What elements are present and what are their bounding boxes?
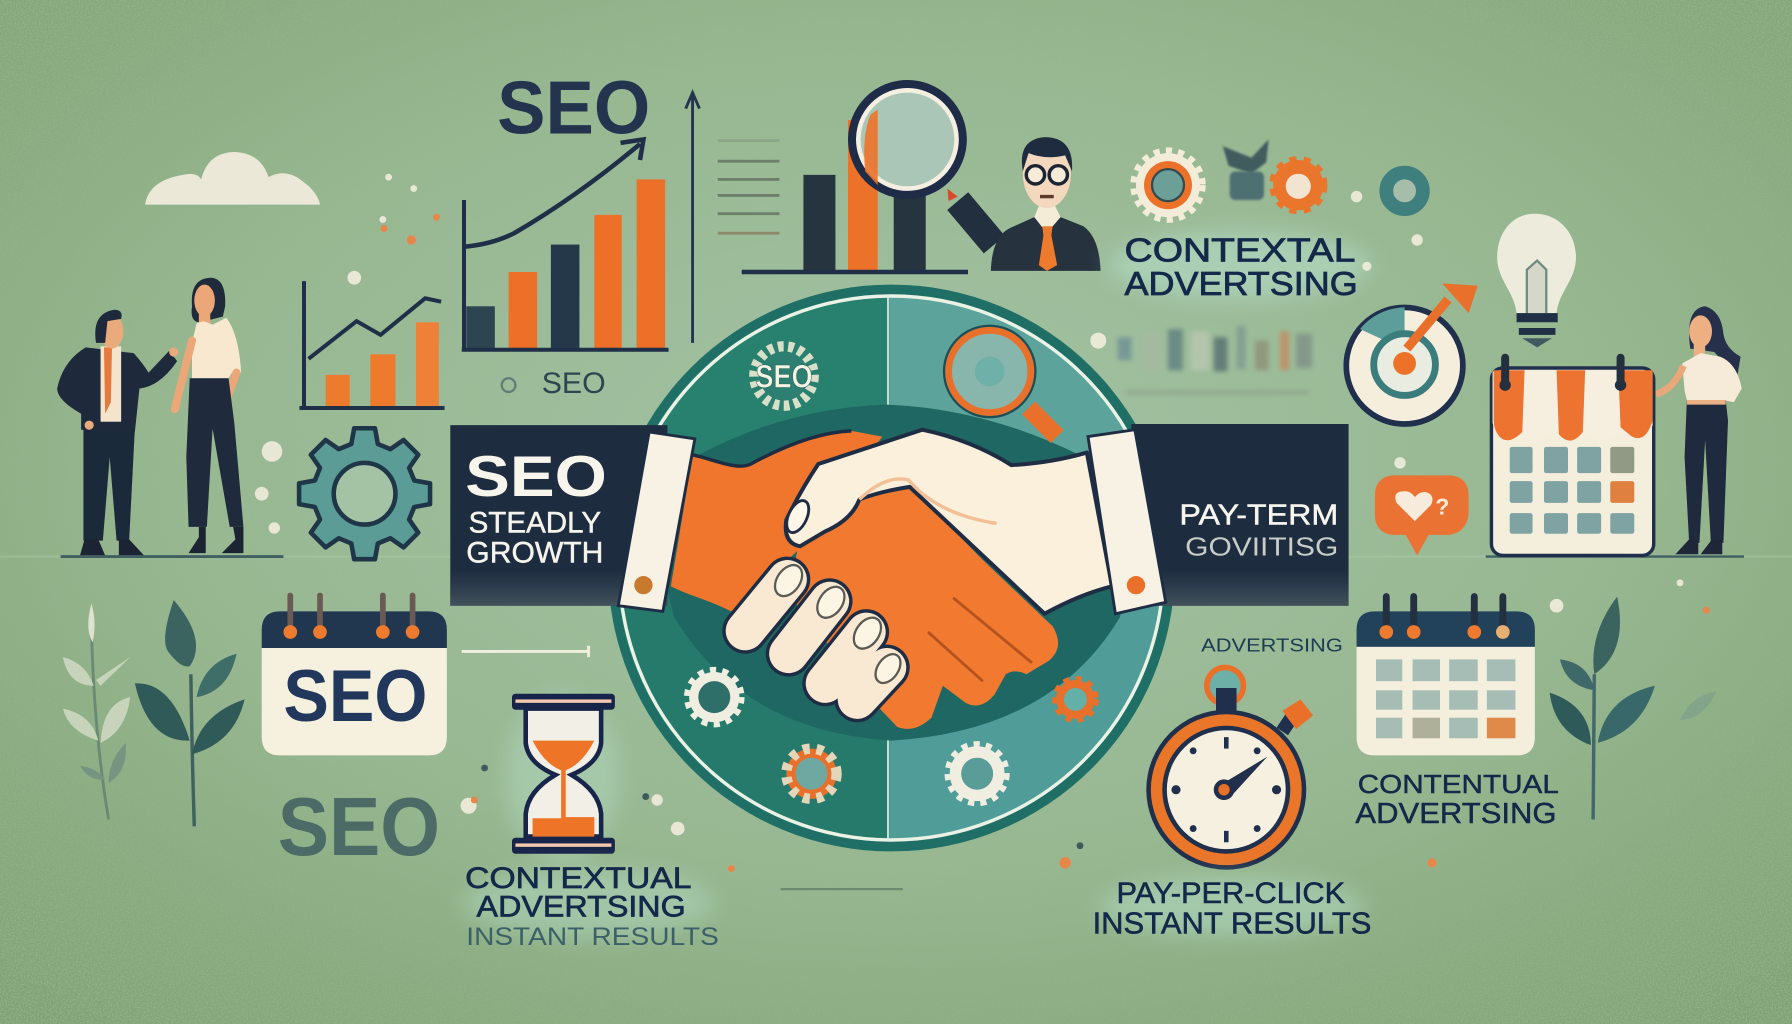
label: contextual advertising instant results: INSTANT RESULTS <box>466 923 719 951</box>
glow behind pay-per-click label <box>1101 877 1363 936</box>
icon: stopwatch <box>1146 667 1313 870</box>
label: small SEO <box>502 367 606 400</box>
bar: right pay-term band: PAY-TERM <box>1179 500 1338 532</box>
glow behind contextual label <box>1109 231 1371 299</box>
person: man with glasses <box>991 137 1101 271</box>
icon: dark plant left <box>135 600 245 826</box>
decorative specks <box>255 174 1710 889</box>
blurred bar strip <box>1118 326 1312 394</box>
label: contextal advertising: CONTEXTAL <box>1125 233 1355 270</box>
icon: lightbulb <box>1497 214 1576 347</box>
label: pay-per-click instant results <box>1093 877 1371 941</box>
icon: gears in circle lower left <box>689 672 739 722</box>
label: pay-per-click instant results: INSTANT RESULTS <box>1093 906 1371 941</box>
badge: SEO gear in circle: SEO <box>755 358 813 394</box>
icon: right cuff <box>1088 430 1166 614</box>
label: contextual advertising instant results <box>465 862 719 951</box>
bar: left SEO band: SEO <box>465 445 607 509</box>
icon: like speech bubble: ? <box>1435 493 1449 519</box>
icon: left gear <box>299 428 430 559</box>
icon: target with arrow <box>1346 283 1478 424</box>
label: contextual advertising instant results: ADVERTSING <box>477 891 686 924</box>
label: contentual advertising: CONTENTUAL <box>1358 769 1559 799</box>
chart: rising bars with arrow <box>462 139 669 350</box>
icon: left cuff <box>618 432 695 611</box>
icon: calendar with SEO <box>262 595 447 755</box>
icon: like speech bubble <box>1375 475 1469 555</box>
icon: magnifier in circle <box>944 326 1057 437</box>
chart: small line and bars <box>299 281 445 408</box>
icon: calendar with SEO: SEO <box>283 656 427 737</box>
icon: vertical arrow <box>686 93 699 343</box>
label: faded SEO: SEO <box>278 782 440 873</box>
glow behind left lower label <box>463 869 714 937</box>
icon: orange gear in circle <box>1056 680 1095 719</box>
icon: hourglass <box>505 694 619 859</box>
icon: calendar lower right <box>1357 597 1535 755</box>
person: woman at right <box>1486 306 1744 557</box>
bar: right pay-term band: GOVIITISG <box>1185 531 1338 561</box>
label: contentual advertising: ADVERTSING <box>1355 798 1557 830</box>
person: woman at left <box>61 278 283 557</box>
label: contextal advertising: ADVERTSING <box>1125 266 1358 303</box>
panel: central circle <box>608 285 1175 851</box>
icon: plant right <box>1550 597 1717 819</box>
chart: bars under magnifier <box>742 120 968 272</box>
illustration: handshake <box>671 430 1112 729</box>
icon: cloud <box>145 152 320 205</box>
label: small SEO: SEO <box>542 367 606 400</box>
icon: top gears group <box>1136 139 1423 217</box>
bar: left SEO band: STEADLY <box>469 507 601 540</box>
icon: faded plant left <box>63 603 130 819</box>
icon: gear in circle lower centre left <box>786 749 837 799</box>
label: pay-per-click instant results: PAY-PER-CLICK <box>1117 877 1345 910</box>
person: man at left <box>57 310 178 555</box>
icon: large magnifier <box>853 85 994 245</box>
decorative list ticks <box>718 141 779 233</box>
title: SEO: SEO <box>497 66 650 150</box>
label: advertising small: ADVERTSING <box>1201 634 1343 655</box>
badge: SEO gear in circle <box>754 346 814 406</box>
label: contentual advertising <box>1355 769 1559 830</box>
icon: gear in circle lower centre right <box>950 746 1005 801</box>
label: contextal advertising <box>1125 233 1358 303</box>
label: contextual advertising instant results: CONTEXTUAL <box>465 862 691 895</box>
bar: left SEO band: GROWTH <box>466 536 603 569</box>
bar: right pay-term band <box>1131 424 1349 606</box>
bar: left SEO band <box>450 425 667 606</box>
icon: calendar with awning <box>1491 358 1654 555</box>
icon: small arrow line <box>462 646 589 657</box>
